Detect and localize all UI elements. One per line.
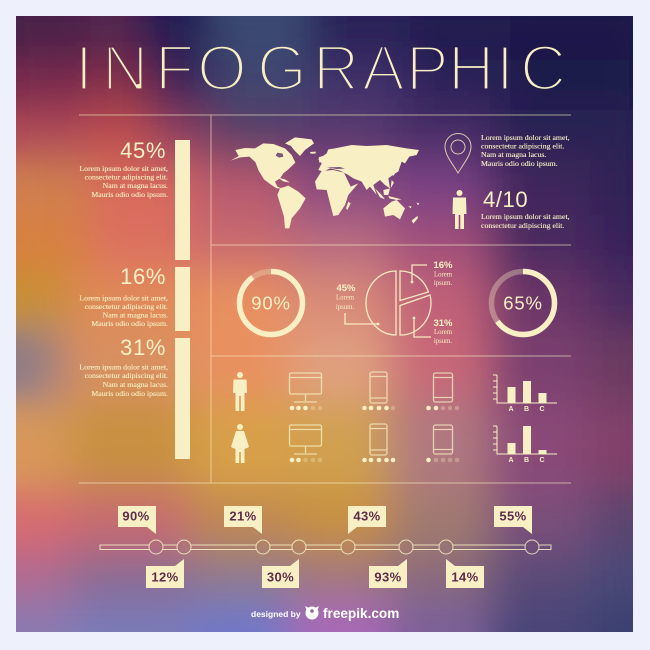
- stat 31%: Mauris odio odio ipsum.: [91, 389, 168, 398]
- stat 45%: Nam at magna lacus.: [103, 181, 168, 190]
- pie label 45%: Lorem: [336, 294, 355, 302]
- callout 55%: 55%: [499, 508, 527, 524]
- pie label 31%: Lorem: [434, 329, 453, 336]
- icon: phone: [362, 372, 395, 410]
- donut chart 90%: 90%: [251, 292, 291, 314]
- icon: monitor: [290, 425, 322, 462]
- icon: tablet: [426, 373, 459, 410]
- icon: freepik logo: [305, 606, 319, 620]
- stat 45%: [79, 138, 168, 199]
- stat 31%: Lorem ipsum dolor sit amet,: [79, 362, 168, 372]
- world map: [231, 137, 419, 228]
- title: INFOGRAPHIC: [75, 32, 566, 104]
- stat 45%: 45%: [120, 138, 166, 163]
- callout 43%: 43%: [353, 508, 381, 524]
- bar chart: men: B: [524, 406, 529, 413]
- stat 16%: consectetur adipiscing elit.: [85, 302, 168, 311]
- donut chart 65%: [492, 272, 554, 334]
- callout 30%: 30%: [267, 570, 294, 584]
- panel: location note: Mauris odio odio ipsum.: [481, 159, 558, 168]
- bar chart: men: [493, 375, 557, 413]
- donut chart 65%: 65%: [503, 292, 543, 314]
- icon: tablet: [426, 425, 459, 462]
- panel: location note: Lorem ipsum dolor sit amet,: [481, 133, 570, 142]
- vertical bars: [175, 140, 190, 459]
- callout 12%: 12%: [151, 570, 179, 584]
- bar chart: women: C: [539, 457, 545, 464]
- callout 93%: 93%: [374, 570, 402, 584]
- callout 93%: [369, 559, 407, 588]
- panel: device usage, men: [233, 372, 557, 413]
- icon: man: [233, 372, 247, 411]
- stat 16%: Nam at magna lacus.: [103, 310, 168, 320]
- bar chart: women: A: [508, 457, 514, 464]
- timeline track: [100, 540, 551, 554]
- pie label 31%: ipsum.: [434, 338, 452, 345]
- panel: location note: [445, 133, 570, 173]
- callout 43%: [348, 506, 386, 534]
- timeline: [100, 506, 551, 588]
- bar chart: men: A: [508, 406, 514, 413]
- pie label 16%: ipsum.: [434, 280, 452, 287]
- stat 16%: 16%: [120, 264, 166, 289]
- callout 30%: [262, 559, 299, 588]
- panel: 4/10 stat: [452, 187, 570, 230]
- panel: device usage, women: [231, 424, 557, 464]
- panel: location note: consectetur adipiscing elit.: [481, 142, 564, 150]
- pie label 31%: 31%: [433, 318, 453, 329]
- pie label 16%: 16%: [433, 260, 453, 271]
- callout 90%: 90%: [122, 508, 150, 524]
- stat 31%: [79, 335, 168, 398]
- pie chart: [336, 260, 453, 345]
- bar chart: men: C: [539, 406, 545, 413]
- panel: 4/10 stat: Lorem ipsum dolor sit amet,: [481, 212, 570, 221]
- icon: phone: [362, 424, 395, 462]
- footer credit: [251, 606, 399, 621]
- stat 31%: consectetur adipiscing elit.: [85, 371, 168, 380]
- pie label 45%: ipsum.: [336, 304, 354, 311]
- footer credit: designed by: [251, 609, 301, 619]
- callout 14%: [446, 559, 484, 588]
- bar chart: women: B: [524, 457, 529, 464]
- panel: location note: Nam at magna lacus.: [481, 150, 546, 159]
- footer credit: freepik.com: [323, 606, 399, 621]
- pie label 31%: [433, 318, 453, 345]
- icon: map pin: [445, 134, 471, 173]
- callout 21%: [224, 506, 262, 534]
- pie label 45%: [336, 283, 356, 311]
- bar chart: women: [493, 426, 557, 464]
- callout 90%: [118, 506, 156, 534]
- donut chart 90%: [240, 272, 302, 334]
- callout 12%: [146, 559, 184, 588]
- stat 45%: consectetur adipiscing elit.: [85, 172, 168, 182]
- icon: person: [452, 190, 466, 229]
- stat 31%: 31%: [120, 335, 166, 360]
- stat 16%: Lorem ipsum dolor sit amet,: [79, 294, 168, 302]
- pie label 45%: 45%: [336, 283, 356, 294]
- stat 45%: Lorem ipsum dolor sit amet,: [79, 164, 168, 173]
- icon: woman: [231, 424, 249, 463]
- pie label 16%: [433, 260, 453, 287]
- panel: 4/10 stat: 4/10: [483, 187, 528, 212]
- callout 55%: [494, 506, 532, 534]
- stat 16%: Mauris odio odio ipsum.: [91, 319, 168, 328]
- stat 45%: Mauris odio odio ipsum.: [91, 190, 168, 199]
- callout 21%: 21%: [229, 508, 257, 524]
- panel: left statistics: [79, 138, 190, 459]
- stat 16%: [79, 264, 168, 328]
- panel: 4/10 stat: consectetur adipiscing elit.: [481, 221, 564, 230]
- icon: monitor: [290, 373, 322, 410]
- stat 31%: Nam at magna lacus.: [103, 380, 168, 389]
- callout 14%: 14%: [451, 570, 479, 584]
- pie label 16%: Lorem: [434, 272, 453, 278]
